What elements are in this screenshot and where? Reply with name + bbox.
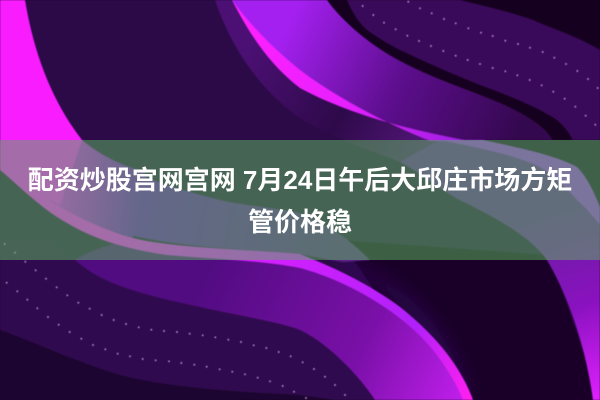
title: 配资炒股宫网宫网 7月24日午后大邱庄市场方矩	[28, 165, 572, 195]
lower darkest band	[0, 330, 335, 400]
dark lower right area	[340, 240, 600, 400]
right light band	[440, 140, 600, 225]
top magenta band	[232, 0, 470, 141]
magenta sweeping band	[0, 160, 473, 400]
inner magenta-to-purple fade	[20, 140, 145, 238]
title	[28, 165, 572, 237]
glow beside lower ribbon	[345, 260, 470, 400]
title: 管价格稳	[248, 207, 352, 237]
dark curved stripe	[327, 0, 600, 141]
left magenta shape	[0, 0, 82, 205]
top right upper ribbon	[232, 0, 553, 141]
dark purple outer ribbon	[215, 0, 600, 400]
lower purple ribbon	[75, 238, 473, 400]
lower dotted panel	[0, 240, 375, 400]
translucent green title band	[0, 140, 600, 260]
right lower ribbon	[400, 140, 600, 400]
inner blue-purple area right	[110, 160, 370, 262]
dark region above right band	[483, 140, 600, 207]
dotted ribbon panel	[347, 0, 600, 141]
